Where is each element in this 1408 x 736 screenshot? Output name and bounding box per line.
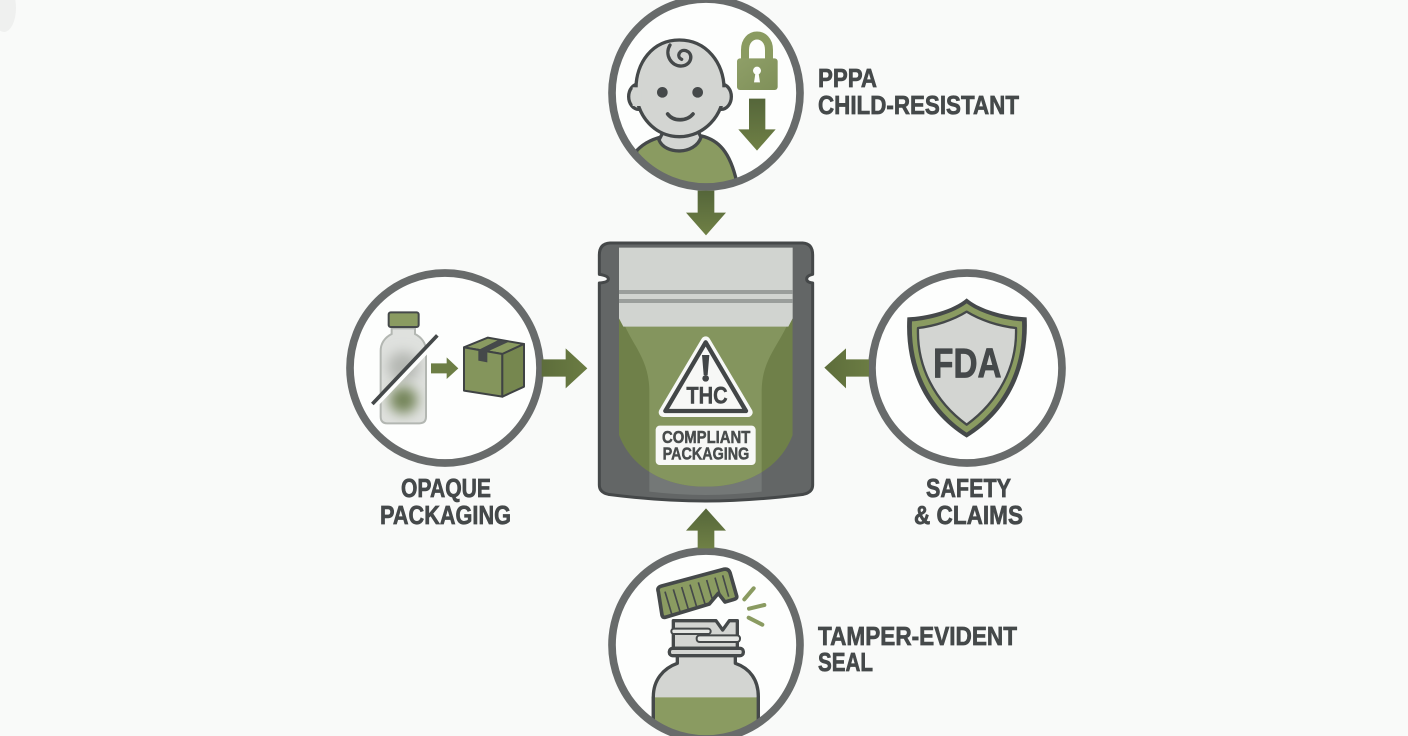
pouch body <box>599 243 813 501</box>
corner smudge <box>0 0 16 32</box>
panel: central pouch <box>599 243 813 501</box>
label: safety and claims: SAFETY <box>926 473 1011 503</box>
arrow: top to pouch <box>686 191 726 235</box>
label: PPPA child-resistant: PPPA <box>818 63 877 93</box>
circle: opaque badge <box>350 273 587 463</box>
label: tamper-evident seal <box>818 621 1017 677</box>
compliant packaging label: COMPLIANT <box>662 427 750 447</box>
icon: opened bottle <box>653 621 758 736</box>
label: safety and claims: & CLAIMS <box>914 500 1023 530</box>
circle: PPPA badge <box>612 0 800 235</box>
arrow: bottom to pouch <box>686 508 726 548</box>
label: tamper-evident seal: TAMPER-EVIDENT <box>818 621 1017 651</box>
icon: box <box>464 338 524 397</box>
icon: down arrow <box>738 99 776 151</box>
pouch side shading <box>649 435 762 495</box>
icon: bottle <box>372 312 440 427</box>
panel: opaque packaging <box>350 273 587 530</box>
circle: tamper badge <box>612 508 800 736</box>
label: PPPA child-resistant <box>818 63 1019 120</box>
circle: FDA badge <box>824 273 1062 463</box>
arrow: right to pouch <box>824 348 869 388</box>
arrow: left to pouch <box>542 348 587 388</box>
label: PPPA child-resistant: CHILD-RESISTANT <box>818 90 1019 120</box>
label: opaque packaging <box>380 473 511 530</box>
icon: baby <box>629 40 737 200</box>
label: opaque packaging: PACKAGING <box>380 500 511 530</box>
label: tamper-evident seal: SEAL <box>818 647 873 677</box>
warning triangle <box>663 341 748 412</box>
panel: PPPA child-resistant <box>612 0 1019 235</box>
icon: snap marks <box>744 588 764 625</box>
pouch window <box>619 248 793 327</box>
compliant packaging label: PACKAGING <box>663 444 749 464</box>
warning triangle: THC <box>686 383 728 410</box>
icon: shield: FDA <box>933 339 1001 386</box>
icon: torn cap <box>658 569 737 617</box>
panel: tamper-evident seal <box>612 508 1017 736</box>
zipper lines <box>619 290 793 303</box>
panel: safety and claims <box>824 273 1062 530</box>
pouch green fill <box>618 315 793 488</box>
icon: padlock <box>737 35 778 90</box>
label: opaque packaging: OPAQUE <box>401 473 491 503</box>
label: safety and claims <box>914 473 1023 530</box>
icon: shield <box>907 298 1027 438</box>
arrow: bottle to box <box>431 357 458 379</box>
infographic <box>0 0 1066 736</box>
compliant packaging label <box>656 426 756 465</box>
